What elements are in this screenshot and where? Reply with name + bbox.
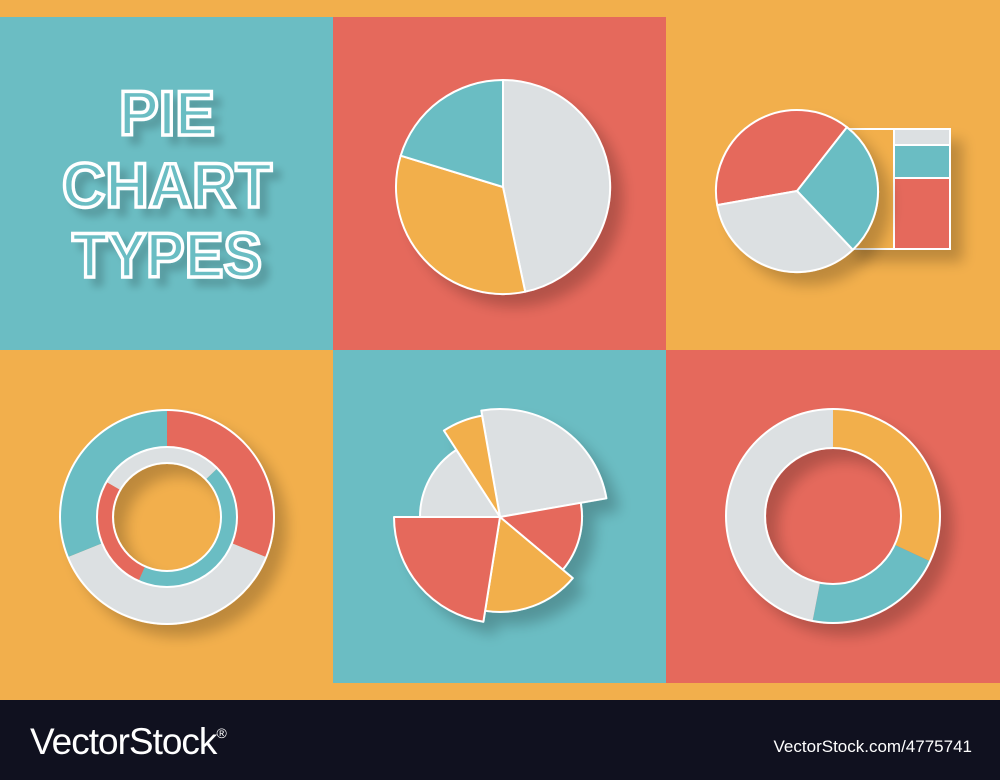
title text (62, 79, 272, 291)
panel: polar area chart (333, 350, 666, 683)
panel: pie with bar (666, 0, 1000, 350)
chart: pie (396, 80, 610, 294)
chart: polar area (394, 409, 606, 622)
footer logo: VectorStock (30, 721, 216, 762)
panel: title (0, 17, 333, 350)
chart: stacked bar legend (845, 129, 950, 249)
footer url: VectorStock.com/4775741 (774, 737, 972, 756)
footer bar (0, 700, 1000, 780)
chart: pie (716, 110, 878, 272)
title text: TYPES (72, 221, 262, 291)
title text: PIE (119, 79, 215, 149)
title text: CHART (62, 151, 272, 221)
panel: basic pie (333, 17, 666, 350)
chart: nested donut (60, 410, 274, 624)
footer logo: ® (216, 725, 227, 741)
panel: nested donut (0, 350, 333, 683)
chart: donut (726, 409, 940, 623)
panel: donut (666, 350, 1000, 683)
